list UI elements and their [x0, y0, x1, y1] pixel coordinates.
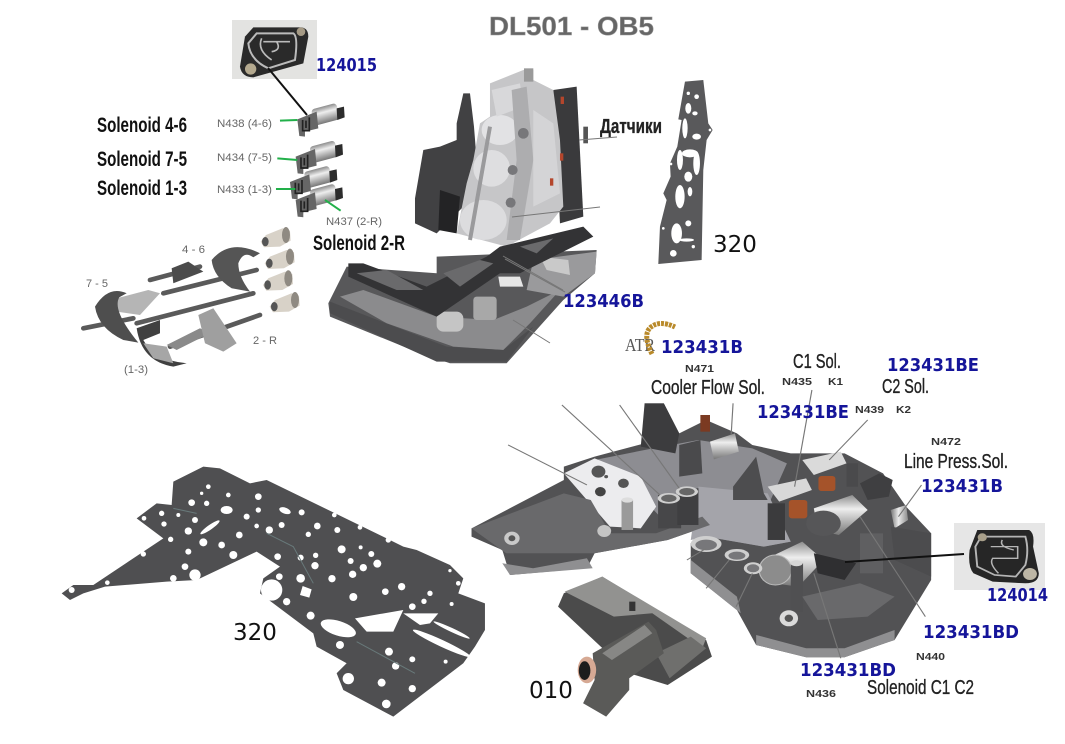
part number 123431B (top): 123431B — [661, 337, 743, 358]
lower part numbers — [757, 355, 1019, 681]
lower solenoid labels: N471 — [685, 364, 715, 375]
lower part numbers: 123431B — [921, 476, 1003, 497]
title: DL501 - OB5 — [489, 11, 654, 41]
lower solenoid labels: K2 — [896, 405, 911, 416]
solenoid labels: Solenoid 2-R — [313, 232, 405, 255]
solenoid code labels — [217, 118, 382, 228]
panel: upper mechatronic unit — [328, 68, 597, 363]
lower part numbers: 123431BD — [923, 622, 1019, 643]
left arm — [472, 493, 710, 553]
shifter forks and pistons — [83, 227, 300, 367]
clutch solenoids — [768, 452, 893, 540]
lower solenoid labels — [651, 351, 1008, 700]
lower solenoid labels: C1 Sol. — [793, 351, 841, 373]
leader: gasket to solenoid — [268, 68, 307, 115]
lower solenoid labels: K1 — [828, 377, 843, 388]
lower solenoid labels: N439 — [855, 405, 885, 416]
fork labels: 2 - R — [253, 335, 277, 347]
lower solenoid labels: N472 — [931, 437, 962, 448]
lighter lower skirt — [502, 558, 895, 657]
lower solenoid labels: C2 Sol. — [882, 376, 929, 398]
solenoid labels: Solenoid 7-5 — [97, 148, 187, 171]
lower rings — [691, 536, 762, 574]
lower solenoid labels: Line Press.Sol. — [904, 451, 1008, 473]
solenoid stack — [276, 103, 345, 217]
cooler solenoid — [710, 433, 739, 459]
part number 124015: 124015 — [316, 55, 377, 76]
black cross frame — [348, 227, 593, 317]
solenoid labels — [97, 114, 405, 255]
solenoid labels: Solenoid 4-6 — [97, 114, 187, 137]
fork labels — [86, 244, 277, 376]
solenoid code labels: N437 (2-R) — [326, 216, 382, 228]
solenoid code labels: N433 (1-3) — [217, 184, 272, 196]
panel: gasket photo 124014 — [954, 523, 1045, 590]
logo: ATR — [625, 324, 675, 355]
logo: ATR: ATR — [625, 335, 655, 355]
panel: lower mechatronic body — [472, 390, 931, 658]
lower solenoid labels: N440 — [916, 652, 946, 663]
number 320 (right): 320 — [713, 232, 757, 258]
lower solenoid labels: Cooler Flow Sol. — [651, 377, 765, 399]
panel: gasket photo 124015 — [232, 20, 317, 79]
bosses — [658, 495, 681, 528]
fork labels: (1-3) — [124, 364, 148, 376]
solenoid labels: Solenoid 1-3 — [97, 177, 187, 200]
part number 123446B: 123446B — [563, 291, 644, 312]
fork labels: 7 - 5 — [86, 278, 108, 290]
rear dark panels — [415, 87, 588, 233]
lower part numbers: 123431BE — [887, 355, 979, 376]
lower solenoid labels: Solenoid C1 C2 — [867, 677, 974, 699]
lower solenoid labels: N435 — [782, 377, 813, 388]
number 010: 010 — [529, 678, 573, 704]
solenoid code labels: N438 (4-6) — [217, 118, 272, 130]
solenoid code labels: N434 (7-5) — [217, 152, 272, 164]
leader: gasket to valve body — [845, 554, 964, 562]
part number 124014: 124014 — [987, 585, 1048, 606]
valve body — [457, 68, 564, 247]
lower solenoid labels: N436 — [806, 689, 837, 700]
lower part numbers: 123431BD — [800, 660, 896, 681]
leader lines — [508, 390, 925, 658]
top deck — [595, 440, 791, 547]
fork labels: 4 - 6 — [182, 244, 205, 256]
sensors label: Датчики — [600, 116, 662, 138]
filter 010 — [558, 577, 712, 717]
lower housing — [328, 250, 597, 363]
white plate — [564, 458, 656, 528]
upper unit leader lines — [503, 137, 617, 343]
panel: large gasket 320 — [62, 467, 485, 717]
pressure solenoids — [759, 495, 931, 612]
number 320 (left): 320 — [233, 620, 277, 646]
lower part numbers: 123431BE — [757, 402, 849, 423]
panel: narrow gasket 320 — [658, 80, 713, 264]
